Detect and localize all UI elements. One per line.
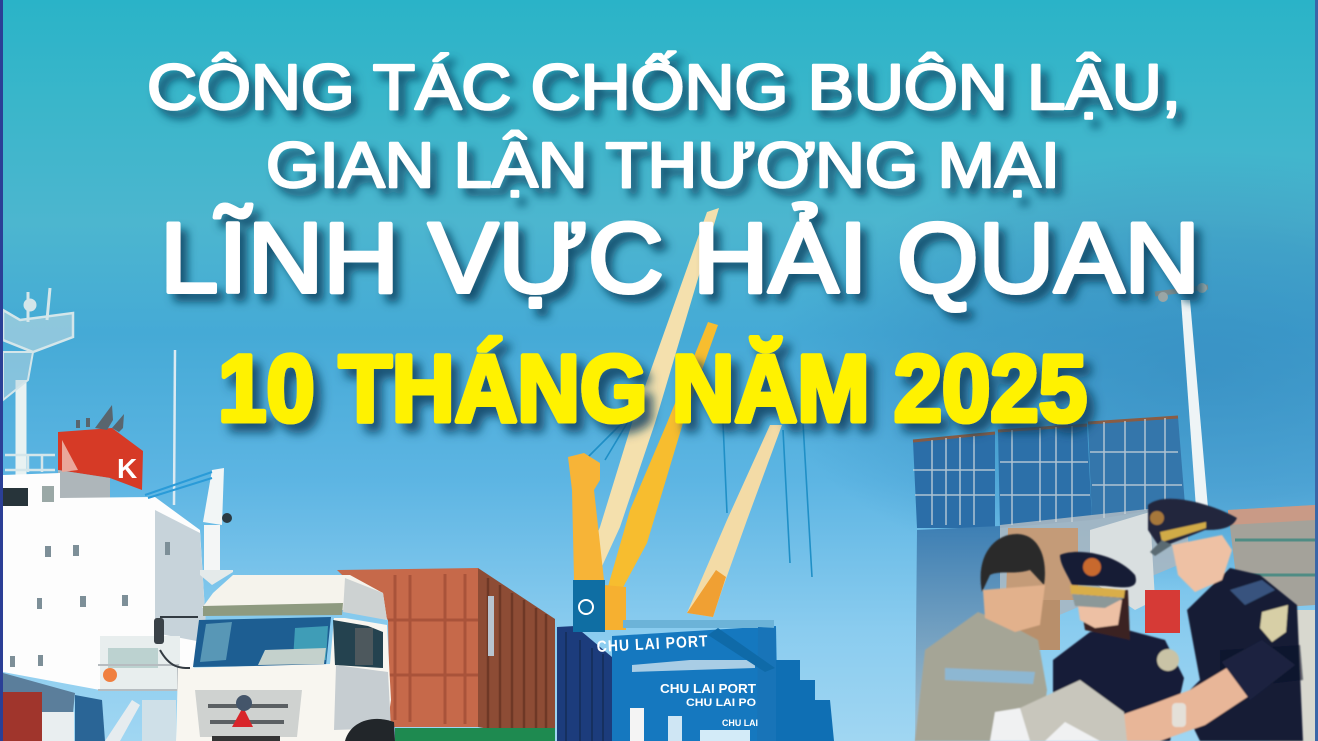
- crane boom front: [580, 208, 719, 577]
- ship superstructure: [3, 473, 207, 690]
- gantry sign text: CHU LAI PORT: [596, 633, 709, 656]
- male officer: [1107, 499, 1303, 741]
- light pole: [1155, 283, 1208, 508]
- title: line 2: GIAN LẬN THƯƠNG MẠI: [266, 129, 1060, 201]
- inspection document: [1020, 680, 1127, 741]
- navy shipping container: [557, 626, 612, 741]
- ship crane: [145, 468, 233, 585]
- gantry sign text: CHU LAI PORT: [660, 681, 756, 696]
- gantry sign text: [596, 633, 758, 728]
- gantry sign text: CHU LAI: [722, 718, 758, 728]
- photo: port scene: [3, 208, 1315, 741]
- blue containers behind officers: [913, 417, 1315, 741]
- officers group: [915, 499, 1303, 741]
- date subtitle: 10 THÁNG NĂM 2025: [218, 336, 1087, 442]
- crane boom rear: [687, 425, 782, 617]
- orange shipping container: [337, 568, 555, 741]
- title: line 3: LĨNH VỰC HẢI QUAN: [160, 202, 1200, 313]
- ship mast: [3, 288, 175, 505]
- woman officer: [1053, 552, 1184, 741]
- cable lines: [585, 385, 812, 577]
- ship funnel: [58, 405, 143, 500]
- title: line 1: CÔNG TÁC CHỐNG BUÔN LẬU,: [147, 51, 1181, 123]
- worker in grey shirt: [915, 534, 1047, 741]
- dock containers at lower left: [3, 673, 176, 741]
- ship funnel: K: [117, 453, 137, 484]
- crane tower: [568, 453, 604, 580]
- truck: [154, 575, 395, 741]
- gantry sign text: CHU LAI PO: [686, 697, 756, 709]
- crane boom middle: [607, 322, 718, 593]
- harbour cranes: [568, 208, 812, 632]
- crane base: [573, 580, 605, 632]
- blue gantry: Chu Lai Port: [596, 620, 834, 741]
- gloves and papers: [990, 708, 1100, 741]
